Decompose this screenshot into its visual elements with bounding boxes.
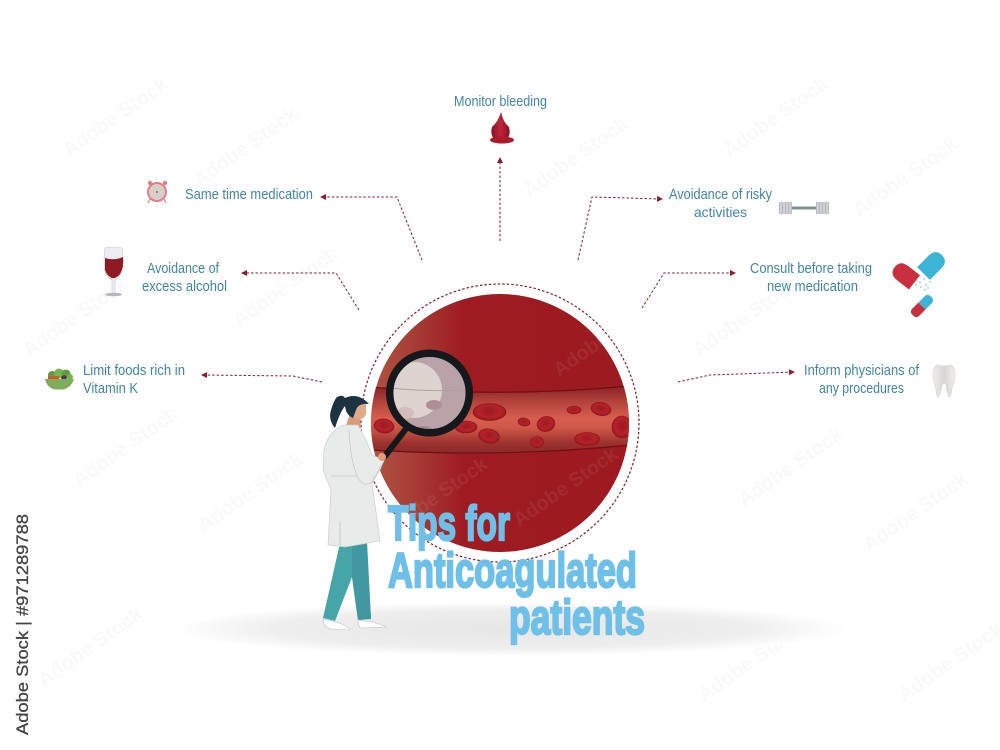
arrow: consult bbox=[642, 273, 735, 308]
neck and head bbox=[345, 414, 361, 428]
hand bbox=[378, 453, 386, 461]
icon: blood drop bbox=[490, 112, 514, 144]
text: Adobe Stock bbox=[34, 603, 148, 691]
dashed ring bbox=[361, 284, 639, 562]
arrow: inform physicians bbox=[678, 372, 794, 382]
label: avoidance of risky activities: Avoidance of risky bbox=[669, 187, 773, 203]
arrow: monitor bleeding bbox=[499, 158, 501, 241]
title: patients bbox=[509, 591, 645, 645]
title bbox=[388, 497, 645, 645]
red blood cells bbox=[373, 401, 632, 448]
hair bbox=[330, 396, 369, 428]
blood vessel circle: Adobe Stock bbox=[549, 293, 663, 381]
trousers bbox=[323, 543, 371, 621]
label: same time medication: Same time medication bbox=[185, 187, 313, 203]
label: monitor bleeding: Monitor bleeding bbox=[454, 94, 547, 110]
icon: salad bowl bbox=[45, 368, 74, 390]
arrow: vitamin K bbox=[202, 375, 322, 382]
label: limit foods rich in vitamin K: Limit foods rich in bbox=[83, 363, 185, 379]
text: Adobe Stock bbox=[59, 73, 173, 161]
icon: dumbbell bbox=[779, 202, 829, 214]
label: avoidance of risky activities: activities bbox=[694, 204, 747, 220]
text: Adobe Stock bbox=[689, 273, 803, 361]
label: avoidance of excess alcohol bbox=[142, 261, 227, 295]
text: Adobe Stock bbox=[194, 448, 308, 536]
label: inform physicians of any procedures: any procedures bbox=[819, 381, 904, 397]
coat bbox=[323, 425, 384, 547]
icon: tooth bbox=[933, 365, 955, 397]
blood vessel circle: Adobe Stock bbox=[509, 443, 623, 531]
icon: pills bbox=[889, 249, 948, 319]
blood vessel circle bbox=[371, 294, 629, 552]
label: limit foods rich in vitamin K: Vitamin K bbox=[83, 381, 138, 397]
label: inform physicians of any procedures: Inform physicians of bbox=[804, 363, 920, 379]
text: Adobe Stock bbox=[719, 73, 833, 161]
doctor figure bbox=[323, 396, 386, 630]
text: Adobe Stock bbox=[229, 243, 343, 331]
arrow: risky activities bbox=[578, 197, 662, 260]
text: Adobe Stock bbox=[519, 113, 633, 201]
text: Adobe Stock bbox=[849, 133, 963, 221]
text: Adobe Stock bbox=[694, 618, 808, 706]
label: inform physicians of any procedures bbox=[804, 363, 920, 397]
text: Adobe Stock bbox=[859, 468, 973, 556]
icon: wine glass bbox=[104, 247, 123, 296]
arrow: same time medication bbox=[321, 197, 422, 260]
text: Adobe Stock bbox=[189, 103, 303, 191]
ground shadow bbox=[172, 602, 848, 656]
label: avoidance of excess alcohol: Avoidance of bbox=[147, 261, 220, 277]
magnifying glass bbox=[385, 353, 470, 456]
text: Adobe Stock bbox=[734, 423, 848, 511]
label: avoidance of risky activities bbox=[669, 187, 773, 220]
icon: alarm clock bbox=[148, 181, 167, 203]
text: Adobe Stock bbox=[69, 403, 183, 491]
stock credit: Adobe Stock | #971289788 bbox=[14, 514, 32, 735]
label: limit foods rich in vitamin K bbox=[83, 363, 185, 397]
arrow: excess alcohol bbox=[242, 273, 359, 310]
text: Adobe Stock bbox=[19, 273, 133, 361]
shoes bbox=[323, 619, 350, 630]
label: consult before taking new medication bbox=[750, 261, 872, 295]
title: Anticoagulated bbox=[388, 544, 637, 598]
title: Tips for bbox=[388, 497, 510, 551]
label: consult before taking new medication: Consult before taking bbox=[750, 261, 872, 277]
label: avoidance of excess alcohol: excess alcohol bbox=[142, 279, 227, 295]
label: consult before taking new medication: new medication bbox=[767, 279, 858, 295]
blood vessel circle: Adobe Stock bbox=[379, 453, 493, 541]
